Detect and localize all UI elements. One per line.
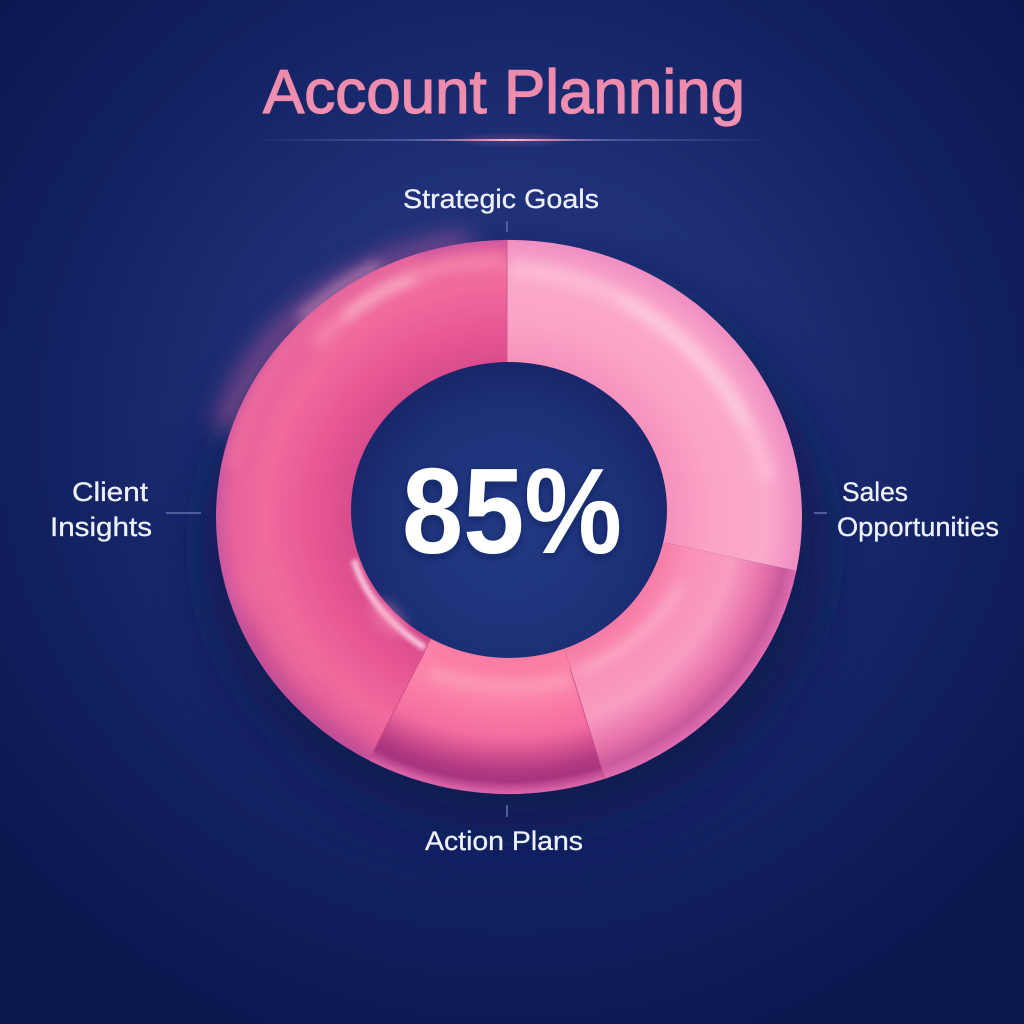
label: client insights: Insights xyxy=(50,512,152,542)
label: sales opportunities: Sales xyxy=(842,477,908,507)
label: sales opportunities xyxy=(814,477,999,542)
segment: strategic goals xyxy=(507,240,802,571)
ring highlights xyxy=(232,257,770,758)
ring shadow and glow xyxy=(203,244,827,830)
segment: client insights xyxy=(216,240,507,760)
label: sales opportunities: Opportunities xyxy=(837,512,999,542)
donut chart xyxy=(216,240,802,794)
title: Account Planning xyxy=(263,58,745,127)
title divider xyxy=(250,135,774,145)
label: strategic goals: Strategic Goals xyxy=(403,184,599,214)
label: action plans: Action Plans xyxy=(425,826,583,856)
inner glow spill xyxy=(364,594,412,642)
segment: sales opportunities xyxy=(564,542,796,779)
label: client insights: Client xyxy=(72,477,149,507)
center hole xyxy=(349,360,669,660)
segment: action plans xyxy=(368,638,605,794)
center value: 85% xyxy=(402,443,622,579)
segment dividers xyxy=(370,240,605,780)
label: client insights xyxy=(50,477,201,542)
